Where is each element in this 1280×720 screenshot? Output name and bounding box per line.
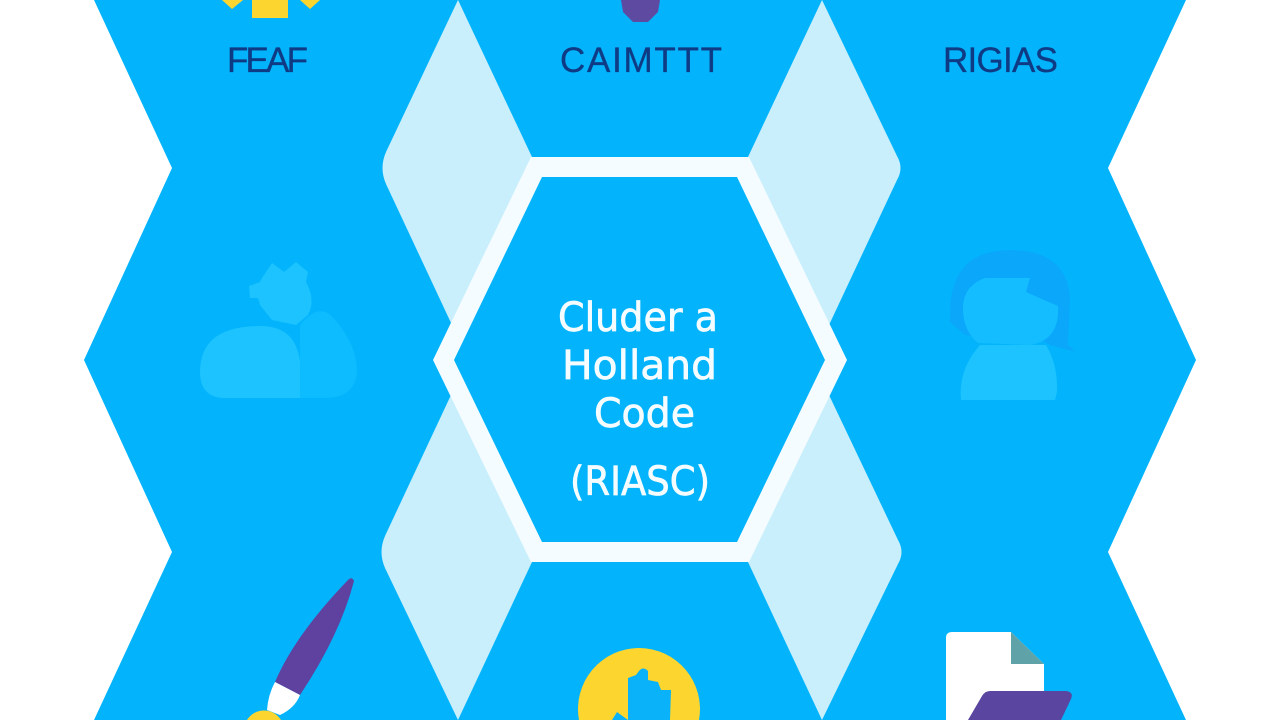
icon: yellow circle with hand (578, 648, 700, 720)
diamond: upper left (382, 0, 532, 325)
document page (946, 632, 1044, 720)
person head (249, 262, 312, 325)
brush ferrule (267, 682, 300, 715)
hexagon inner fill (454, 177, 825, 542)
icon: faint person left (200, 262, 357, 398)
hand (612, 668, 671, 720)
head (963, 278, 1058, 345)
icon: faint person right (942, 250, 1076, 400)
yellow disc (578, 648, 700, 720)
title line 2: Holland (562, 343, 717, 389)
diamond: lower left (382, 395, 532, 720)
centre title (558, 295, 718, 505)
diamond: upper right (748, 0, 900, 325)
diamond: lower right (748, 395, 902, 720)
brush handle (275, 578, 354, 695)
hexagon white ring (433, 157, 847, 562)
centre hexagon (433, 157, 847, 562)
light diamonds (382, 0, 902, 720)
brush tip (247, 711, 281, 720)
hair (942, 250, 1076, 352)
faint back shoulder (300, 311, 357, 398)
document fold (1011, 632, 1044, 664)
title line 3: Code (594, 391, 695, 437)
icon: paint brush (247, 578, 354, 720)
label: RIGIAS: RIGIAS (943, 41, 1058, 80)
person body (200, 326, 300, 398)
title line 1: Cluder a (558, 295, 718, 341)
folder (968, 691, 1072, 720)
label: CAIMTTT: CAIMTTT (560, 41, 722, 80)
icon: purple top centre (621, 0, 660, 22)
icon: document and folder (946, 632, 1072, 720)
icon: yellow top left (222, 0, 320, 18)
body (961, 345, 1057, 400)
title line 4: (RIASC) (570, 459, 710, 505)
label: FEAF: FEAF (227, 41, 308, 80)
